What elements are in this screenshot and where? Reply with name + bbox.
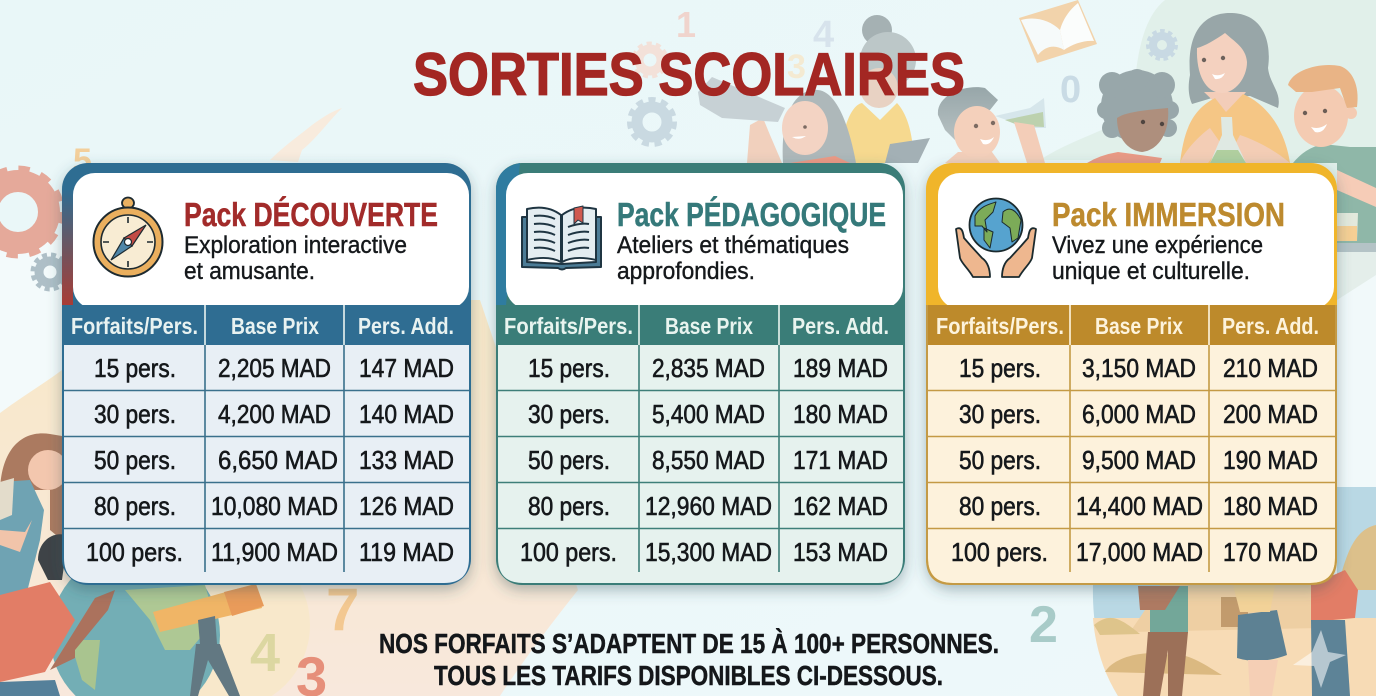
digit 4: 4 [813,14,834,56]
price table: 100 pers. [520,537,617,567]
table header: Pers. Add. [358,313,454,339]
panel: pack pédagogique [496,163,905,585]
price table: 80 pers. [528,491,610,521]
price table: 15 pers. [959,353,1041,383]
price table: 15 pers. [528,353,610,383]
digit 4 bottom: 4 [250,623,280,683]
price table: 50 pers. [94,445,176,475]
pack description: approfondies. [617,258,755,285]
price table: 189 MAD [793,353,888,383]
price table: 153 MAD [793,537,888,567]
digit 0: 0 [1060,69,1081,111]
icon: open book [1019,0,1097,63]
price table: 80 pers. [94,491,176,521]
footer note: NOS FORFAITS S’ADAPTENT DE 15 À 100+ PERSONNES. [379,628,999,659]
illustration: teacher [1180,13,1290,163]
girl [698,77,856,163]
price table: 3,150 MAD [1082,353,1196,383]
illustration: boy with flask [938,87,1046,163]
price table: 30 pers. [959,399,1041,429]
title: SORTIES SCOLAIRES [413,41,965,108]
price table: 170 MAD [1223,537,1318,567]
icon: compass [94,198,162,276]
price table: 15 pers. [94,353,176,383]
price table: 80 pers. [959,491,1041,521]
digit 1: 1 [676,4,696,45]
table header [62,305,471,345]
table header: Base Prix [231,313,319,339]
table header: Base Prix [665,313,753,339]
pack description: Exploration interactive [184,232,407,259]
price table: 210 MAD [1223,353,1318,383]
table header: Pers. Add. [792,313,889,339]
table header: Forfaits/Pers. [71,313,198,339]
icon: blue gear [630,100,674,144]
price table: 5,400 MAD [652,399,765,429]
price table: 140 MAD [359,399,454,429]
pack title: Pack IMMERSION [1052,196,1285,233]
pack description: Ateliers et thématiques [617,232,849,259]
price table: 119 MAD [359,537,454,567]
table header [926,305,1337,345]
price table: 171 MAD [793,445,888,475]
icon: grey gear [33,255,67,289]
price table: 11,900 MAD [211,537,338,567]
price table: 147 MAD [359,353,454,383]
table header: Forfaits/Pers. [936,313,1064,339]
pack description [184,232,407,285]
icon: red gear [0,170,60,254]
price table: 12,960 MAD [645,491,772,521]
digit 3: 3 [787,48,806,86]
pack title: Pack PÉDAGOGIQUE [617,196,886,233]
illustration: gears and digits top [0,0,1176,289]
table header: Base Prix [1095,313,1183,339]
price table: 2,835 MAD [652,353,765,383]
price table: 50 pers. [528,445,610,475]
price table: 126 MAD [359,491,454,521]
woman behind [840,15,930,163]
icon: small gear [1148,31,1176,59]
illustration: child with afro [1087,69,1179,163]
pack description: et amusante. [184,258,315,285]
price table: 190 MAD [1223,445,1318,475]
digit 7: 7 [326,576,359,643]
price table: 9,500 MAD [1082,445,1196,475]
pack description [617,232,849,285]
price table: 30 pers. [528,399,610,429]
table header [496,305,905,345]
price table: 100 pers. [86,537,183,567]
price table: 180 MAD [1223,491,1318,521]
price table: 2,205 MAD [218,353,331,383]
pack description: unique et culturelle. [1052,258,1250,285]
price table: 133 MAD [359,445,454,475]
price table: 6,000 MAD [1082,399,1196,429]
panel: pack découverte [62,163,471,585]
price table: 30 pers. [94,399,176,429]
table header: Forfaits/Pers. [504,313,633,339]
pack description: Vivez une expérience [1052,232,1263,259]
price table [926,305,1337,585]
price table [64,305,469,583]
price table: 180 MAD [793,399,888,429]
price table: 8,550 MAD [652,445,765,475]
icon: globe in hands [956,198,1036,277]
illustration: woman and child bottom left [0,433,359,696]
pack title: Pack DÉCOUVERTE [184,196,438,233]
illustration: digit 2: 2 [1029,596,1058,654]
illustration: blond boy [1288,65,1376,252]
price table: 6,650 MAD [218,445,338,475]
panel: pack immersion [926,163,1337,585]
footer note [379,628,999,691]
footer note: TOUS LES TARIFS DISPONIBLES CI-DESSOUS. [434,660,943,691]
price table: 15,300 MAD [645,537,772,567]
price table: 162 MAD [793,491,888,521]
illustration: students at monument [1093,487,1376,696]
digit 5: 5 [73,142,92,180]
price table: 200 MAD [1223,399,1318,429]
price table: 50 pers. [959,445,1041,475]
icon: open book [522,206,601,270]
price table: 100 pers. [951,537,1048,567]
pack description [1052,232,1263,285]
price table: 17,000 MAD [1076,537,1203,567]
price table: 4,200 MAD [218,399,331,429]
table header: Pers. Add. [1222,313,1319,339]
price table: 14,400 MAD [1076,491,1203,521]
icon: pale gear [634,44,666,76]
price table [498,305,903,583]
sparkle [1293,630,1346,688]
price table: 10,080 MAD [211,491,338,521]
illustration: girl with telescope and woman [698,15,930,163]
